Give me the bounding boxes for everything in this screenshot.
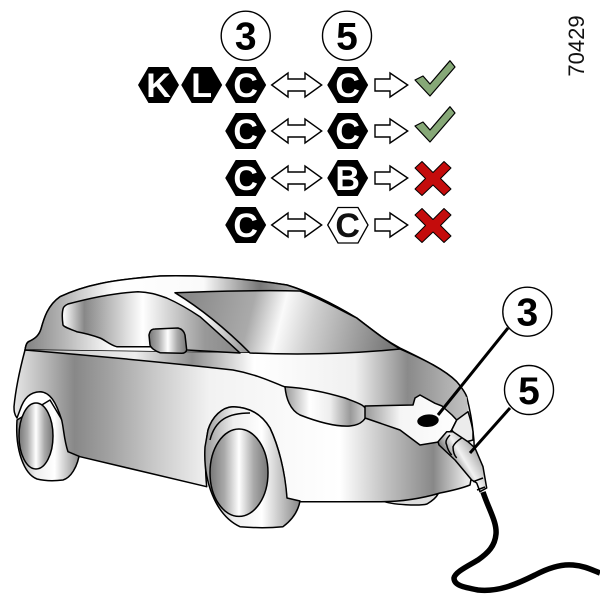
- car illustration: [14, 276, 600, 590]
- row 2: C to C, compatible: [225, 107, 455, 151]
- belt line: [25, 350, 285, 387]
- row 2: C to C, compatible: C: [335, 113, 360, 151]
- row 4: C to outlined C, incompatible: C: [335, 207, 360, 245]
- front wheel: [205, 407, 300, 528]
- row 1: KLC to C, compatible: L: [191, 67, 212, 105]
- row 1: KLC to C, compatible: C: [233, 67, 258, 105]
- row 4: C to outlined C, incompatible: [225, 207, 451, 245]
- charging flap: [365, 395, 457, 445]
- row 3: C to B, incompatible: B: [335, 160, 360, 198]
- far wheel under nose: [383, 494, 438, 505]
- row 1: KLC to C, compatible: [138, 61, 455, 105]
- column header: 5: [322, 11, 372, 60]
- row 3: C to B, incompatible: C: [233, 160, 258, 198]
- row 4: C to outlined C, incompatible: C: [233, 207, 258, 245]
- reference number: 70429: [564, 15, 589, 77]
- column header: 3: 3: [235, 16, 257, 58]
- row 2: C to C, compatible: C: [233, 113, 258, 151]
- compatibility table: [138, 11, 455, 245]
- rear wheel: [17, 400, 80, 481]
- car body: [14, 276, 474, 502]
- callout 3: [438, 287, 552, 415]
- callout 5: 5: [518, 370, 540, 413]
- column header: 3: [221, 11, 270, 60]
- charging plug: [438, 432, 487, 492]
- row 3: C to B, incompatible: [225, 160, 451, 198]
- headlight: [285, 387, 367, 426]
- charging cable: [454, 492, 600, 590]
- windscreen: [175, 291, 400, 354]
- belt panel below windscreen: [25, 349, 468, 420]
- callout 5: [470, 366, 554, 453]
- row 1: KLC to C, compatible: C: [335, 67, 360, 105]
- nose edge line: [400, 349, 467, 397]
- callout 3: 3: [516, 292, 538, 334]
- roof and upper panel: [25, 276, 400, 354]
- column header: 5: 5: [336, 16, 358, 58]
- charging port: [418, 414, 438, 427]
- row 1: KLC to C, compatible: K: [146, 67, 171, 105]
- mirror: [149, 328, 187, 353]
- side window: [62, 292, 240, 353]
- nose highlight: [452, 412, 473, 443]
